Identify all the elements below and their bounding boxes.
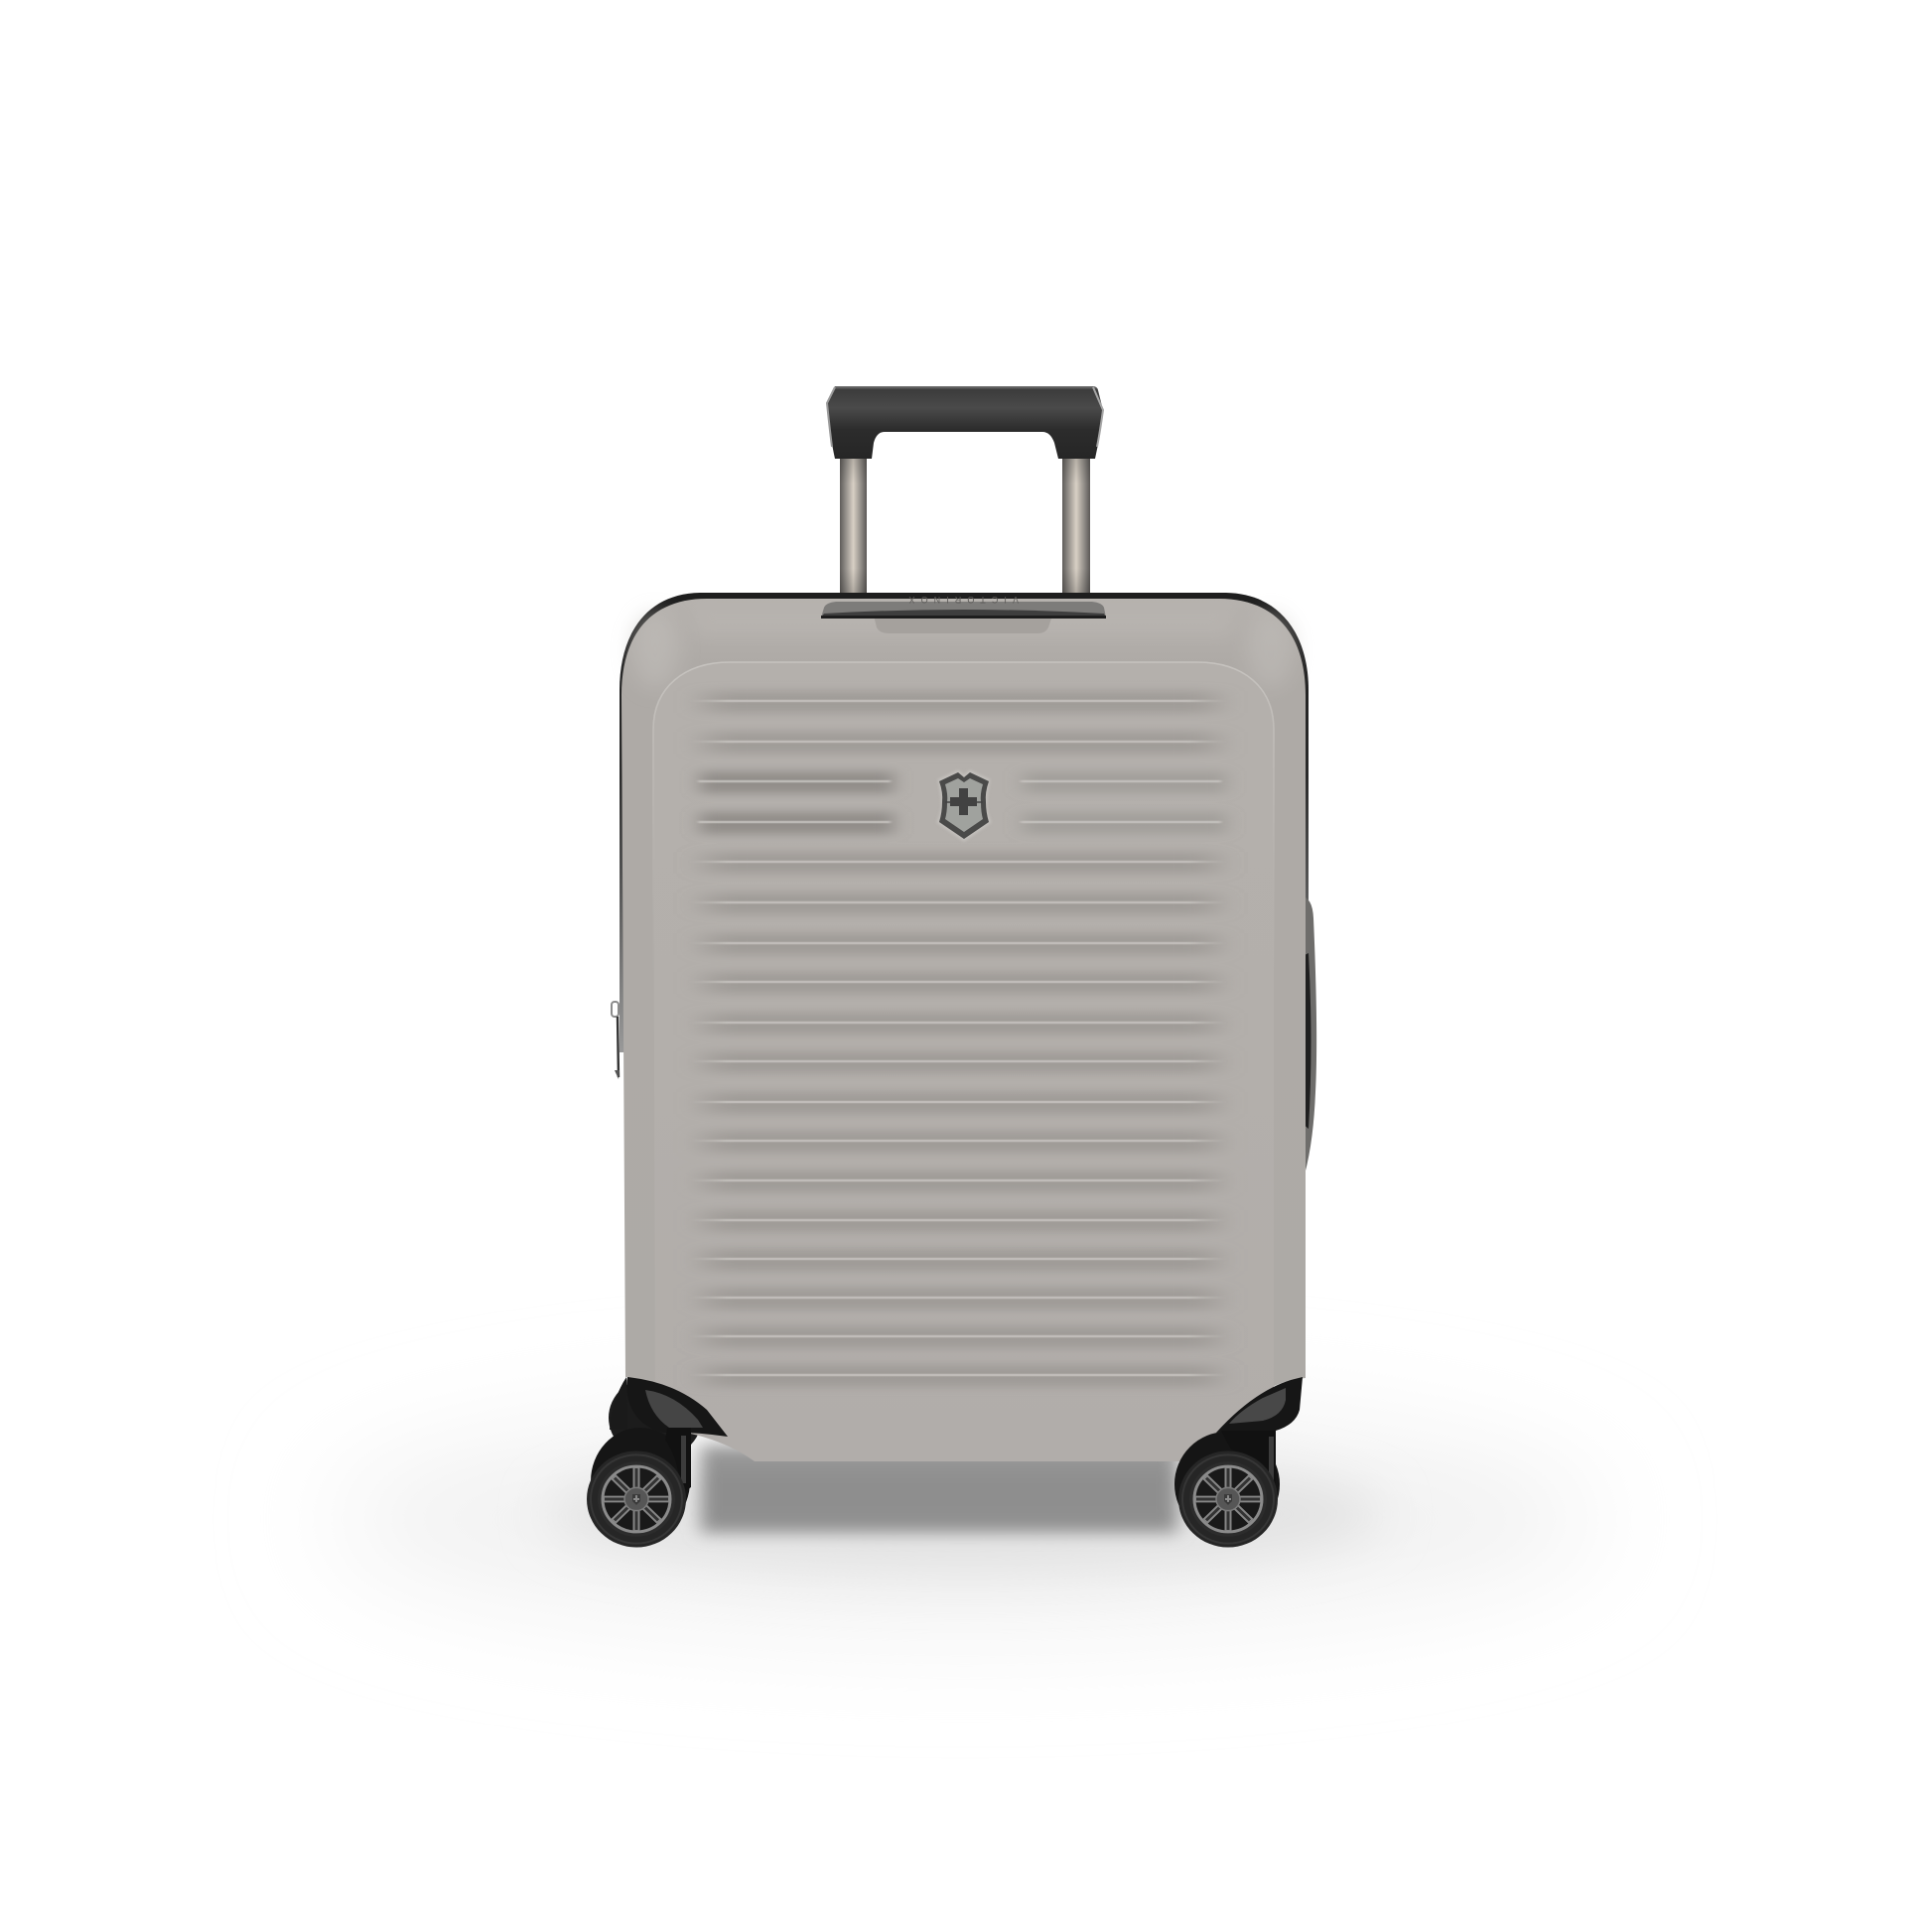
right caster bbox=[1174, 1377, 1303, 1547]
handle recess tab bbox=[874, 616, 1052, 633]
handle bar bbox=[821, 602, 1106, 618]
handle pole left bbox=[840, 452, 867, 596]
suitcase shell bbox=[620, 593, 1316, 1461]
handle pole right bbox=[1062, 452, 1090, 596]
corner guard right bbox=[1216, 1377, 1303, 1433]
fork right bbox=[1174, 1431, 1280, 1537]
front left wheel bbox=[587, 1451, 686, 1547]
shield cross bbox=[950, 788, 977, 815]
swiss shield logo bbox=[938, 771, 990, 840]
rear left wheel bbox=[609, 1376, 702, 1459]
handle grip bbox=[827, 386, 1103, 459]
zipper edge bbox=[620, 593, 1309, 1052]
side carry handle bbox=[1299, 897, 1316, 1174]
top carry handle bbox=[821, 595, 1106, 633]
fork left bbox=[591, 1428, 691, 1535]
corner guard left bbox=[626, 1377, 728, 1437]
handle brand text: VICTORINOX bbox=[907, 595, 1019, 605]
zipper pull bbox=[612, 1002, 620, 1079]
top shell highlights bbox=[631, 613, 679, 688]
front shell bbox=[621, 599, 1306, 1461]
ground shadow bbox=[330, 1410, 1600, 1628]
telescopic handle bbox=[827, 386, 1103, 596]
left caster bbox=[587, 1377, 728, 1547]
front right wheel bbox=[1178, 1451, 1278, 1547]
ridge highlight lines bbox=[690, 700, 1226, 1376]
raised front panel bbox=[653, 662, 1274, 1461]
ridge shadows bbox=[690, 691, 1231, 1387]
